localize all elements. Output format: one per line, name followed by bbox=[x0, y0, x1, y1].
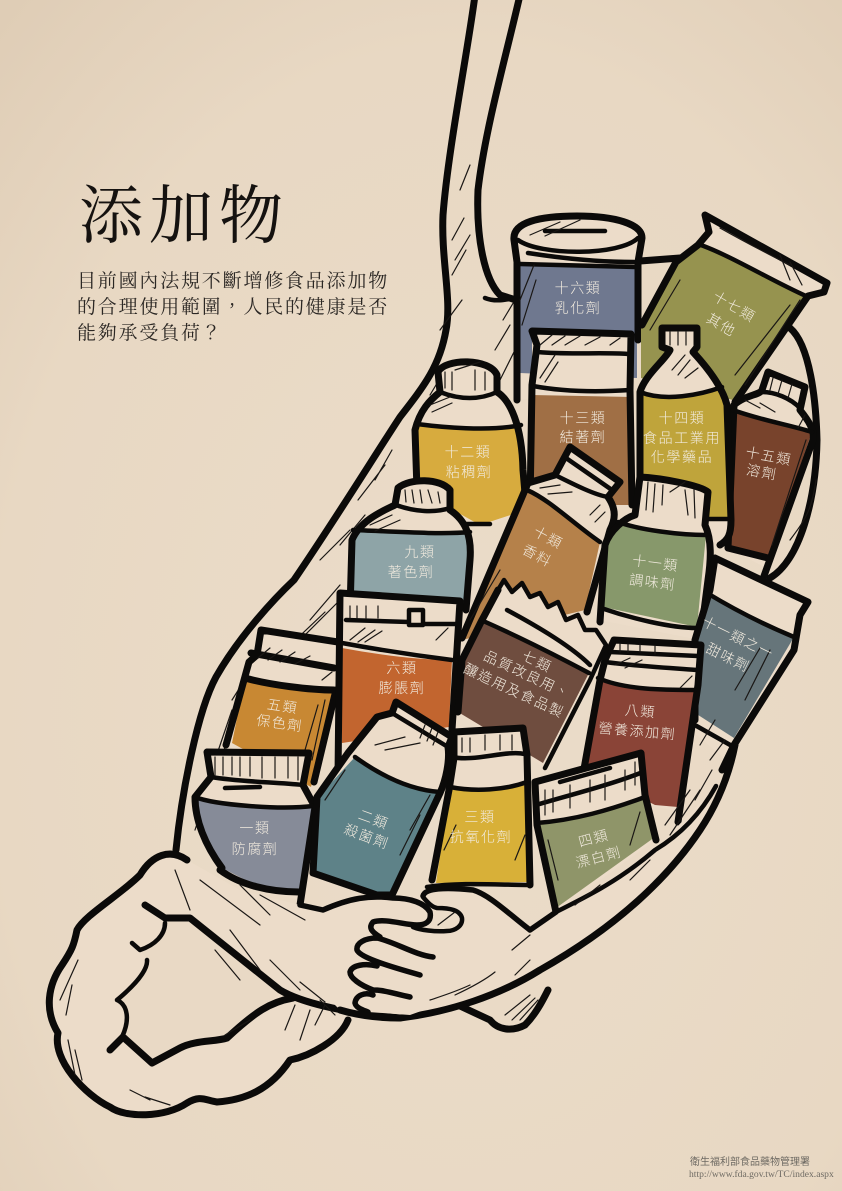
jar 14: 食品工業用化學藥品 bbox=[640, 328, 731, 545]
jar 1: 防腐劑: 防腐劑 bbox=[232, 841, 278, 857]
jar 4: 漂白劑 bbox=[535, 753, 658, 912]
jar 15: 溶劑: 溶劑 bbox=[745, 461, 779, 483]
jar 7: 品質改良用釀造用及食品製: 釀造用及食品製 bbox=[461, 660, 567, 721]
jar 17: 其他 bbox=[640, 215, 827, 402]
jar 7: 品質改良用釀造用及食品製: 七類 bbox=[520, 648, 555, 675]
jar 3: 抗氧化劑 bbox=[427, 728, 530, 887]
jar 9: 著色劑: 著色劑 bbox=[388, 564, 434, 580]
jar 10: 香料: 香料 bbox=[520, 541, 555, 570]
jar 10: 香料 bbox=[460, 447, 620, 640]
jar 6: 膨脹劑: 六類 bbox=[386, 660, 418, 676]
jar 11: 調味劑 bbox=[600, 477, 710, 642]
jar 6: 膨脹劑 bbox=[338, 593, 460, 780]
jar 17: 其他: 其他 bbox=[704, 310, 739, 339]
jar 11-1: 甜味劑: 十一類之一 bbox=[700, 613, 777, 662]
jar 8: 營養添加劑 bbox=[581, 640, 701, 822]
jar 11: 調味劑: 調味劑 bbox=[628, 571, 677, 593]
jar 15: 溶劑 bbox=[728, 372, 813, 576]
jar 11-1: 甜味劑: 甜味劑 bbox=[704, 640, 753, 675]
jar 11-1: 甜味劑 bbox=[693, 558, 808, 770]
jar 13: 結著劑: 結著劑 bbox=[560, 429, 606, 445]
jar 12: 粘稠劑: 粘稠劑 bbox=[446, 464, 492, 480]
jar 1: 防腐劑 bbox=[195, 750, 315, 905]
jar 4: 漂白劑: 四類 bbox=[577, 826, 611, 850]
jar 16: 乳化劑 bbox=[514, 216, 642, 400]
jar 15: 溶劑: 十五類 bbox=[744, 444, 793, 468]
footer credit: http://www.fda.gov.tw/TC/index.aspx bbox=[689, 1169, 834, 1180]
jar 2: 殺菌劑 bbox=[313, 702, 452, 895]
jar 13: 結著劑: 十三類 bbox=[560, 410, 606, 426]
jar 5: 保色劑: 保色劑 bbox=[255, 712, 304, 734]
jar 3: 抗氧化劑: 三類 bbox=[464, 809, 496, 825]
jar 9: 著色劑: 九類 bbox=[404, 544, 436, 560]
jar 8: 營養添加劑: 營養添加劑 bbox=[598, 720, 677, 742]
footer credit bbox=[689, 1155, 834, 1180]
jar 4: 漂白劑: 漂白劑 bbox=[574, 843, 623, 871]
jar 11: 調味劑: 十一類 bbox=[631, 552, 680, 574]
stomach outline bbox=[176, 0, 817, 850]
jar 2: 殺菌劑: 殺菌劑 bbox=[342, 821, 391, 852]
jar 14: 食品工業用化學藥品: 化學藥品 bbox=[651, 449, 713, 465]
intro text: 目前國內法規不斷增修食品添加物 bbox=[77, 270, 389, 292]
right arm and hands bbox=[290, 888, 556, 1029]
jar 2: 殺菌劑: 二類 bbox=[356, 806, 391, 832]
intro text: 的合理使用範圍，人民的健康是否 bbox=[77, 296, 389, 318]
jar 5: 保色劑: 五類 bbox=[266, 696, 299, 716]
jar 9: 著色劑 bbox=[350, 481, 470, 610]
jar 7: 品質改良用釀造用及食品製 bbox=[458, 580, 606, 768]
jar 16: 乳化劑: 十六類 bbox=[555, 280, 601, 296]
jar 8: 營養添加劑: 八類 bbox=[624, 702, 657, 720]
jar 16: 乳化劑: 乳化劑 bbox=[555, 300, 601, 316]
jar 1: 防腐劑: 一類 bbox=[239, 820, 271, 836]
arm and loop bbox=[49, 745, 735, 1115]
jar 17: 其他: 十七類 bbox=[710, 288, 759, 325]
jar 14: 食品工業用化學藥品: 十四類 bbox=[659, 410, 705, 426]
jar 12: 粘稠劑: 十二類 bbox=[445, 444, 491, 460]
jar 6: 膨脹劑: 膨脹劑 bbox=[379, 680, 425, 696]
jar 5: 保色劑 bbox=[226, 630, 340, 790]
intro text bbox=[77, 270, 389, 344]
jar 3: 抗氧化劑: 抗氧化劑 bbox=[450, 829, 512, 845]
intro text: 能夠承受負荷？ bbox=[77, 322, 223, 344]
jar 12: 粘稠劑 bbox=[415, 362, 526, 530]
jar 7: 品質改良用釀造用及食品製: 品質改良用、 bbox=[481, 647, 573, 701]
footer credit: 衛生福利部食品藥物管理署 bbox=[690, 1155, 810, 1168]
jar 13: 結著劑 bbox=[530, 330, 632, 510]
title: 添加物 bbox=[79, 181, 289, 252]
jar 14: 食品工業用化學藥品: 食品工業用 bbox=[643, 430, 721, 446]
jar 10: 香料: 十類 bbox=[531, 523, 566, 552]
